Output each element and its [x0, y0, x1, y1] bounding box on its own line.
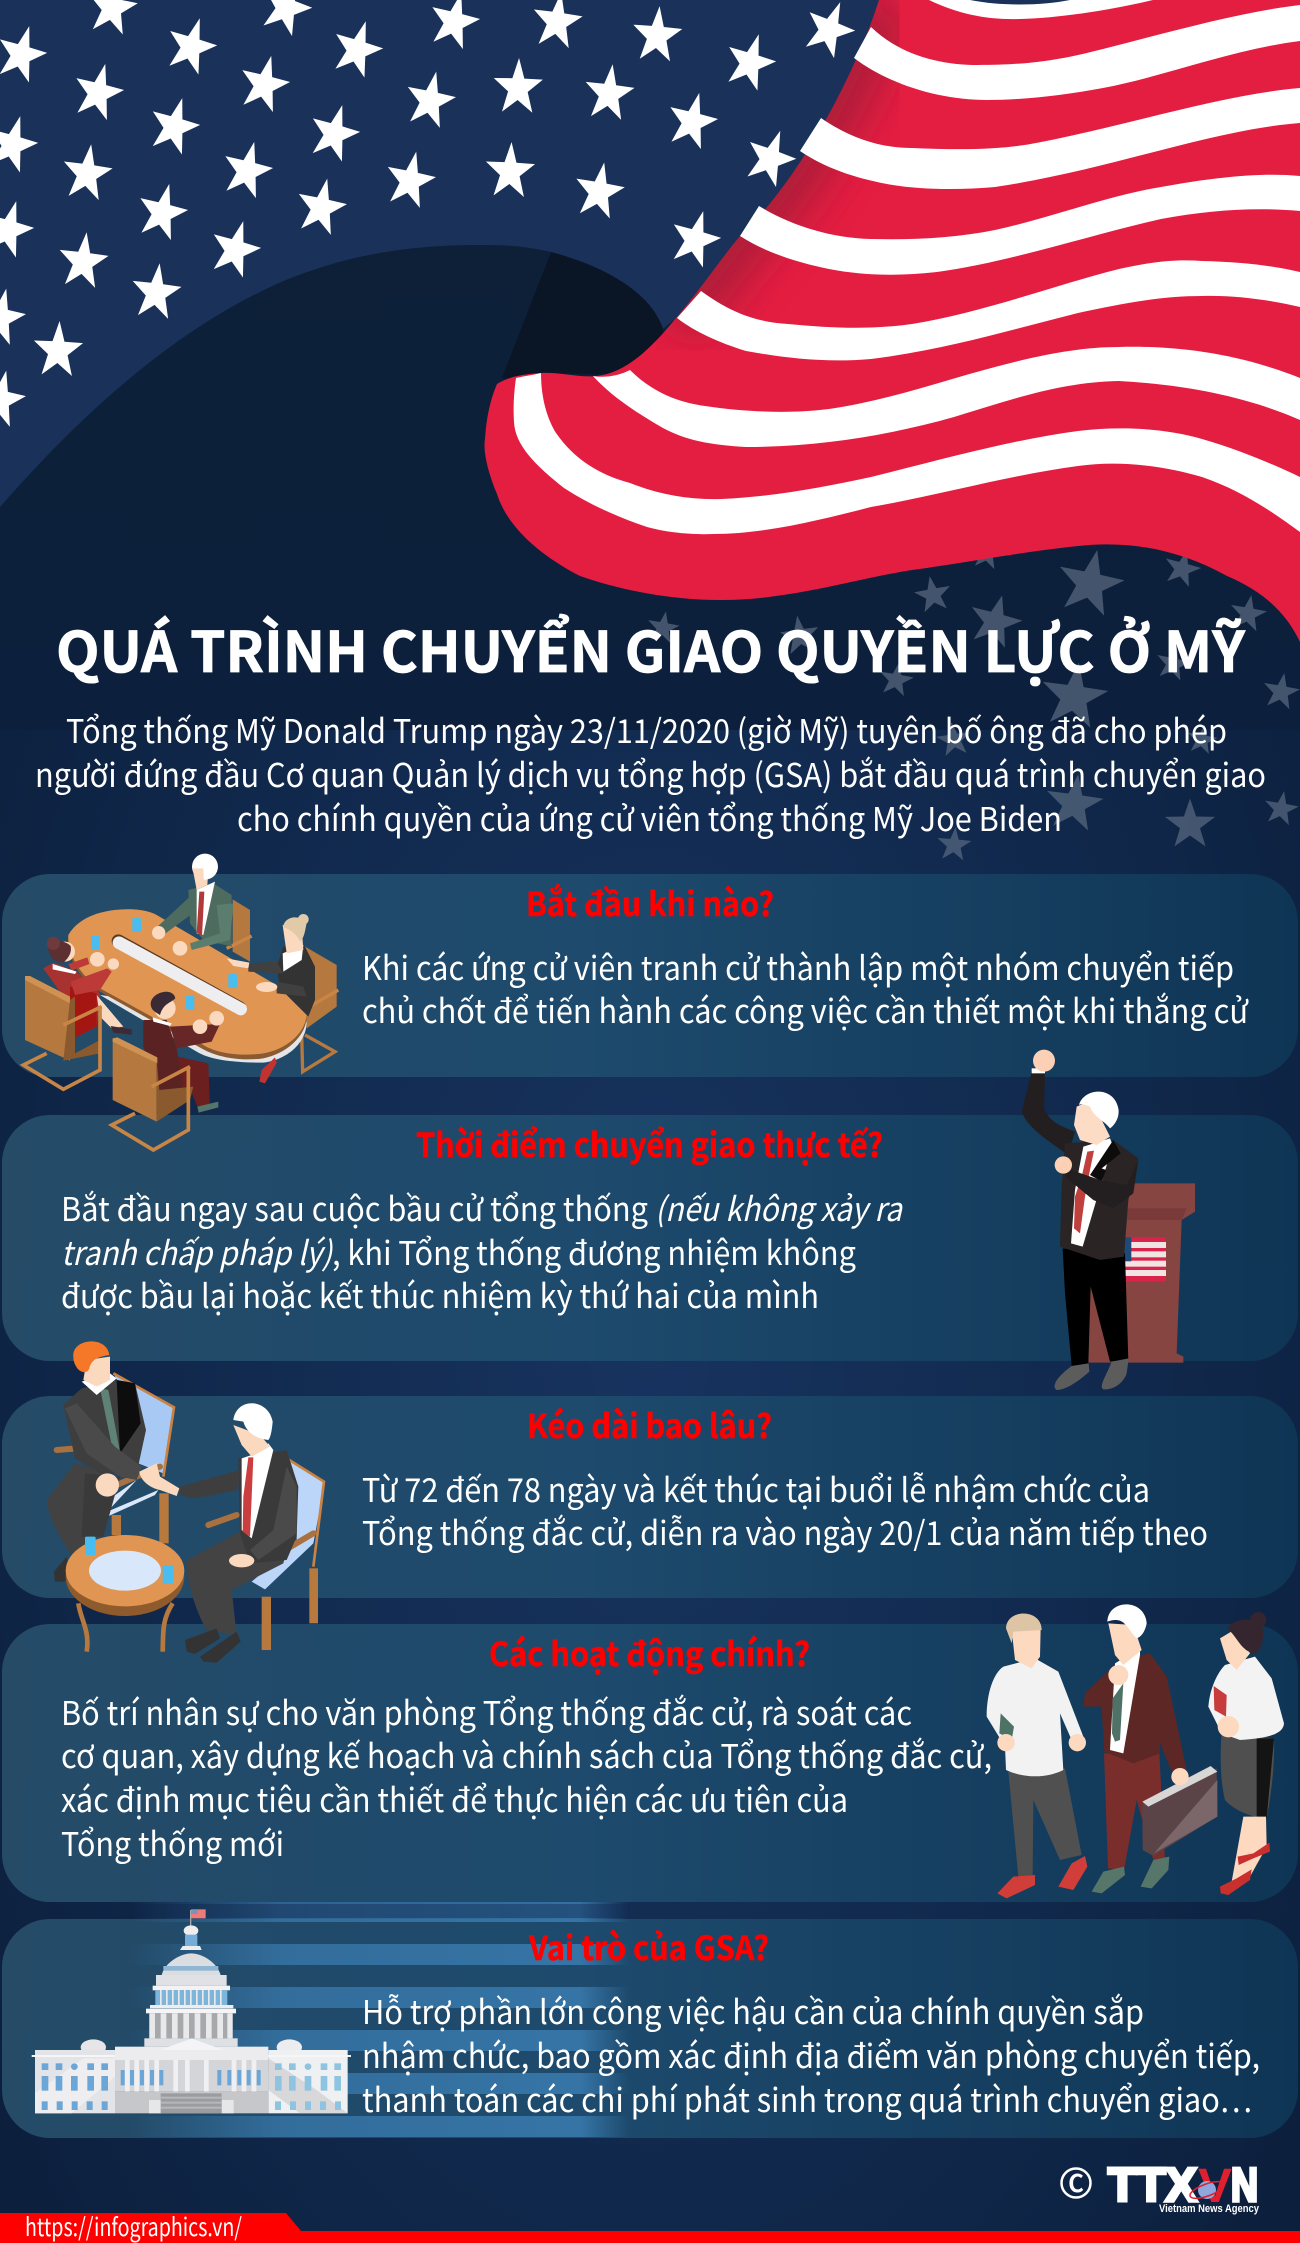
windows left wing [42, 2063, 108, 2110]
text: actual time: được bầu lại hoặc kết thúc nhiệm kỳ thứ hai của mình [61, 1270, 819, 1318]
title: QUÁ TRÌNH CHUYỂN GIAO QUYỀN LỰC Ở MỸ [56, 608, 1246, 689]
man in maroon suit [1083, 1604, 1217, 1893]
flag stripes [484, 0, 1300, 642]
front chair [113, 1038, 157, 1122]
dark flag fold [502, 252, 663, 379]
text: GSA: nhậm chức, bao gồm xác định địa điểm văn phòng chuyển tiếp, [362, 2030, 1260, 2078]
text: actual time: , khi Tổng thống đương nhiệm không [332, 1227, 856, 1275]
table [100, 995, 307, 1063]
right chair [252, 1458, 325, 1589]
woman in white blouse [1208, 1612, 1284, 1895]
red shoe [259, 1057, 277, 1083]
text: duration [362, 1464, 1208, 1555]
heading: GSA: Vai trò của GSA? [528, 1922, 769, 1970]
panel: main activities [2, 1624, 1298, 1902]
copyright symbol: C [1068, 2164, 1084, 2199]
text: actual time [61, 1183, 903, 1318]
person top, green jacket [152, 854, 233, 956]
left chair [25, 976, 70, 1061]
heading: start: Bắt đầu khi nào? [526, 878, 774, 926]
text: GSA: thanh toán các chi phí phát sinh trong quá trình chuyển giao… [362, 2074, 1252, 2122]
text: actual time: (nếu không xảy ra [655, 1183, 903, 1231]
icon: two men shaking hands with round table [47, 1341, 325, 1663]
text: actual time: tranh chấp pháp lý) [61, 1227, 334, 1275]
shaking hands [139, 1463, 179, 1496]
person right, black jacket [227, 914, 315, 1017]
text: GSA [362, 1986, 1260, 2122]
panel: actual transfer time [2, 1115, 1298, 1361]
lower arm [1065, 1160, 1138, 1208]
left chair [113, 1373, 174, 1473]
icon: meeting table with four people [23, 854, 338, 1150]
icon: three people walking [987, 1604, 1284, 1898]
top chair [233, 899, 250, 962]
jacket [1060, 1140, 1138, 1260]
TTXVN wordmark: TTX [1108, 2158, 1197, 2211]
right chair [305, 947, 337, 1028]
briefcase [1142, 1768, 1217, 1856]
intro paragraph: Tổng thống Mỹ Donald Trump ngày 23/11/2020 (giờ Mỹ) tuyên bố ông đã cho phép [66, 705, 1227, 753]
icon: US Capitol building [32, 1909, 351, 2113]
central portico [115, 2047, 268, 2060]
left man [47, 1341, 146, 1582]
text: actual time: Bắt đầu ngay sau cuộc bầu cử tổng thống [61, 1183, 648, 1231]
text: start: Khi các ứng cử viên tranh cử thành lập một nhóm chuyển tiếp [362, 942, 1234, 990]
drum [156, 1975, 227, 1986]
faded background stars [645, 535, 1300, 861]
panel: when does it start [2, 874, 1298, 1077]
raised arm [1022, 1072, 1075, 1155]
heading: activities: Các hoạt động chính? [489, 1628, 810, 1676]
wings [35, 2050, 115, 2113]
text: duration: Tổng thống đắc cử, diễn ra vào ngày 20/1 của năm tiếp theo [362, 1507, 1208, 1555]
text: activities: xác định mục tiêu cần thiết để thực hiện các ưu tiên của [61, 1774, 848, 1822]
glasses [91, 918, 237, 1010]
shirt and tie [1071, 1138, 1113, 1247]
person left, red dress [43, 937, 132, 1040]
panel: duration [2, 1396, 1298, 1598]
white stars [0, 0, 863, 429]
central steps [161, 2093, 222, 2113]
copyright symbol [1062, 2164, 1090, 2199]
person front, maroon suit [143, 992, 224, 1113]
text: activities: Tổng thống mới [61, 1818, 284, 1866]
text: GSA: Hỗ trợ phần lớn công việc hậu cần của chính quyền sắp [362, 1986, 1144, 2034]
capitol background light stripes [130, 1902, 630, 2137]
lantern and dome [184, 1925, 198, 1936]
TTXVN wordmark: V [1198, 2160, 1232, 2213]
TTXVN wordmark [1108, 2158, 1258, 2213]
panel: role of GSA [2, 1902, 1298, 2138]
text: activities: Bố trí nhân sự cho văn phòng Tổng thống đắc cử, rà soát các [61, 1687, 912, 1735]
footer red bar with url [0, 2208, 1300, 2243]
podium [1088, 1183, 1195, 1363]
intro paragraph: cho chính quyền của ứng cử viên tổng thống Mỹ Joe Biden [237, 793, 1062, 841]
heading: actual time: Thời điểm chuyển giao thực tế? [416, 1119, 883, 1167]
TTXVN wordmark: N [1231, 2158, 1258, 2211]
blue star field [0, 0, 879, 507]
intro paragraph [35, 705, 1266, 841]
shoes [1055, 1363, 1089, 1390]
small flag [1124, 1237, 1166, 1281]
url: https://infographics.vn/ [25, 2208, 242, 2243]
text: activities: cơ quan, xây dựng kế hoạch và chính sách của Tổng thống đắc cử, [61, 1730, 992, 1778]
text: duration: Từ 72 đến 78 ngày và kết thúc tại buổi lễ nhậm chức của [362, 1464, 1150, 1512]
icon: speaker at podium [1022, 1050, 1195, 1390]
copyright logo [1062, 2158, 1260, 2215]
text: start: chủ chốt để tiến hành các công việc cần thiết một khi thắng cử [362, 985, 1249, 1033]
right man [180, 1403, 298, 1663]
flag on top [191, 1909, 206, 1927]
windows right wing [275, 2063, 341, 2110]
trousers [1063, 1248, 1128, 1366]
side cupolas [81, 2039, 106, 2055]
text: activities [61, 1687, 992, 1866]
heading: duration: Kéo dài bao lâu? [527, 1400, 772, 1448]
man in white shirt [987, 1614, 1087, 1898]
agency caption: Vietnam News Agency [1159, 2203, 1260, 2215]
round table [78, 1603, 173, 1652]
dark wave behind the flag [0, 230, 1300, 730]
text: start [362, 942, 1249, 1033]
head [1074, 1100, 1110, 1145]
